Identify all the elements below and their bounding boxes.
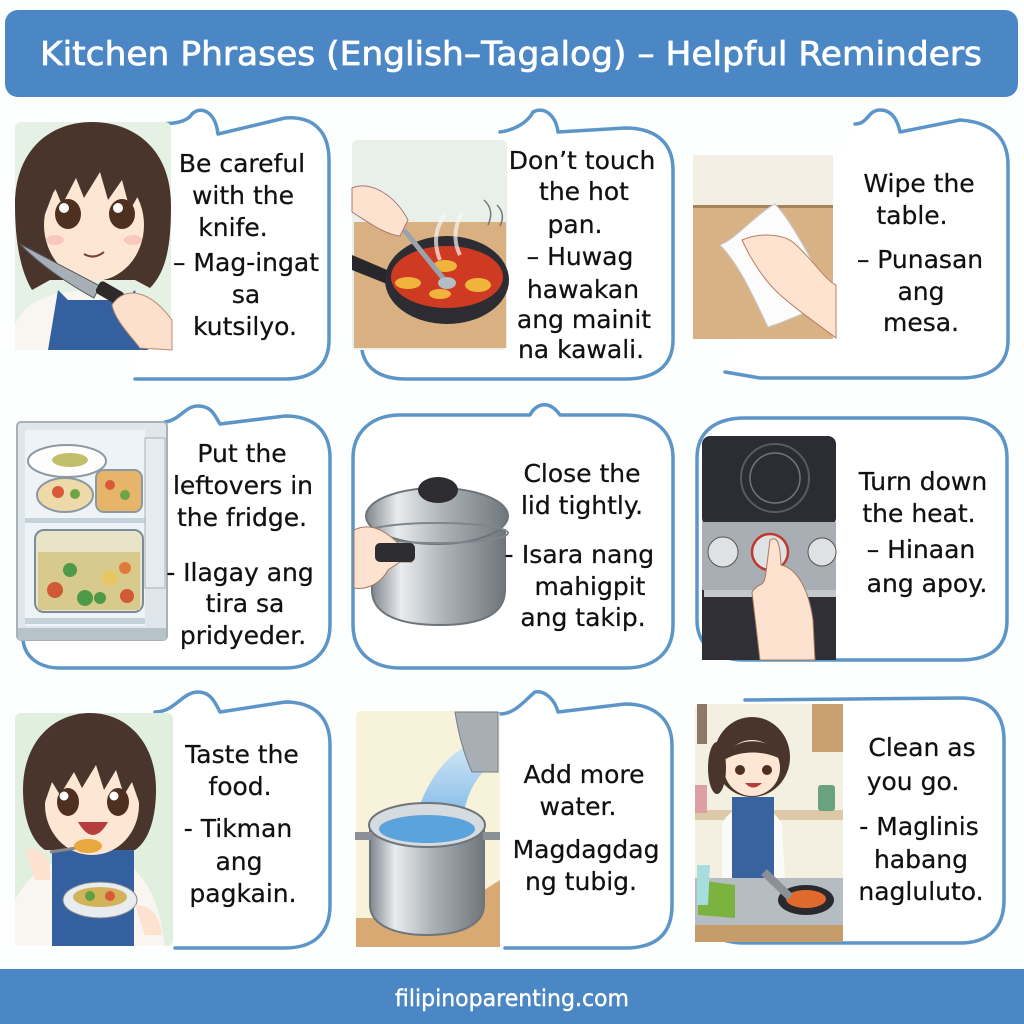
text: leftovers: tira sa (206, 589, 284, 618)
speech bubble 1 (135, 110, 329, 379)
illustration: stove knob (702, 436, 836, 660)
text: wipe: – Punasan (857, 245, 983, 274)
text: turn down: – Hinaan (867, 535, 975, 564)
panel: put the leftovers in the fridge (17, 406, 330, 668)
panel: don't touch the hot pan (352, 110, 673, 379)
text: don't touch: na kawali. (518, 335, 644, 364)
panel: clean as you go (695, 698, 1004, 943)
text: taste: Taste the (184, 740, 299, 769)
panel: add more water (355, 692, 672, 948)
footer text: filipinoparenting.com (395, 986, 629, 1012)
illustration: girl tasting (15, 713, 173, 946)
text: don't touch: pan. (548, 210, 602, 239)
speech bubble 5 (353, 405, 673, 668)
illustration: wiping table (693, 155, 836, 339)
text: be careful (173, 149, 319, 341)
text: close the lid: - (504, 540, 514, 569)
text: be careful: Be careful (179, 149, 305, 178)
text: add water: Magdagdag (513, 835, 659, 864)
panel: wipe the table (693, 110, 1008, 378)
text: clean: - Maglinis (859, 812, 979, 841)
illustration: open fridge (17, 422, 167, 640)
text: clean: habang (874, 845, 968, 874)
text: taste: pagkain. (189, 879, 297, 908)
illustration: pot and water (355, 711, 500, 947)
text: taste: - Tikman (184, 814, 292, 843)
text: leftovers: leftovers in (173, 471, 313, 500)
speech bubble 4 (23, 406, 330, 668)
text: don't touch: the hot (539, 177, 629, 206)
text: clean: you go. (867, 767, 959, 796)
text: close the lid: ang takip. (520, 603, 646, 632)
panel: taste the food (15, 692, 330, 948)
text: wipe (857, 169, 983, 337)
footer bar (0, 969, 1024, 1024)
text: add water: Add more (523, 760, 645, 789)
text: don't touch: hawakan (527, 275, 639, 304)
text: don't touch: Don’t touch (509, 146, 655, 175)
text: turn down (858, 467, 987, 598)
illustration: pot with lid (354, 477, 508, 625)
text: close the lid: lid tightly. (521, 491, 643, 520)
text: leftovers (166, 439, 314, 650)
text: don't touch: – Huwag (527, 242, 633, 271)
text: leftovers: - Ilagay ang (166, 558, 314, 587)
text: close the lid (504, 459, 654, 632)
text: don't touch (509, 146, 655, 364)
text: clean: Clean as (868, 733, 976, 762)
text: turn down: the heat. (862, 499, 976, 528)
text: add water: water. (540, 792, 616, 821)
text: be careful: – Mag-ingat (173, 248, 319, 277)
text: clean: nagluluto. (858, 877, 984, 906)
header banner (5, 10, 1018, 97)
panel: turn down the heat (697, 418, 1007, 660)
text: clean (858, 733, 984, 906)
text: wipe: table. (876, 201, 948, 230)
text: be careful: with the (192, 181, 294, 210)
text: close the lid: Close the (523, 459, 641, 488)
text: taste: food. (208, 772, 272, 801)
text: be careful: knife. (198, 213, 268, 242)
panel: close the lid tightly (353, 405, 673, 668)
text: turn down: ang apoy. (867, 569, 987, 598)
text: close the lid: mahigpit (535, 572, 646, 601)
speech bubble 3 (725, 110, 1008, 378)
text: taste (184, 740, 299, 908)
text: close the lid: Isara nang (522, 540, 654, 569)
illustration: girl at sink (695, 704, 843, 942)
speech bubble 9 (697, 698, 1004, 943)
panel: be careful with the knife (15, 110, 329, 379)
text: wipe: mesa. (883, 308, 959, 337)
text: leftovers: pridyeder. (180, 621, 306, 650)
text: leftovers: the fridge. (177, 503, 307, 532)
text: add water: ng tubig. (525, 867, 637, 896)
text: don't touch: ang mainit (517, 305, 651, 334)
title: Kitchen Phrases (English–Tagalog) – Helpful Reminders (40, 34, 982, 73)
text: wipe: Wipe the (863, 169, 975, 198)
illustration: frying pan (352, 140, 509, 350)
text: be careful: kutsilyo. (193, 312, 297, 341)
text: add water (513, 760, 659, 896)
text: be careful: sa (232, 280, 260, 309)
text: wipe: ang (897, 277, 945, 306)
speech bubble 6 (697, 418, 1007, 660)
text: leftovers: Put the (197, 439, 287, 468)
text: taste: ang (215, 847, 263, 876)
illustration: girl with knife (15, 122, 172, 350)
speech bubble 7 (155, 692, 330, 948)
speech bubble 8 (500, 692, 672, 948)
speech bubble 2 (362, 110, 673, 379)
text: turn down: Turn down (858, 467, 987, 496)
